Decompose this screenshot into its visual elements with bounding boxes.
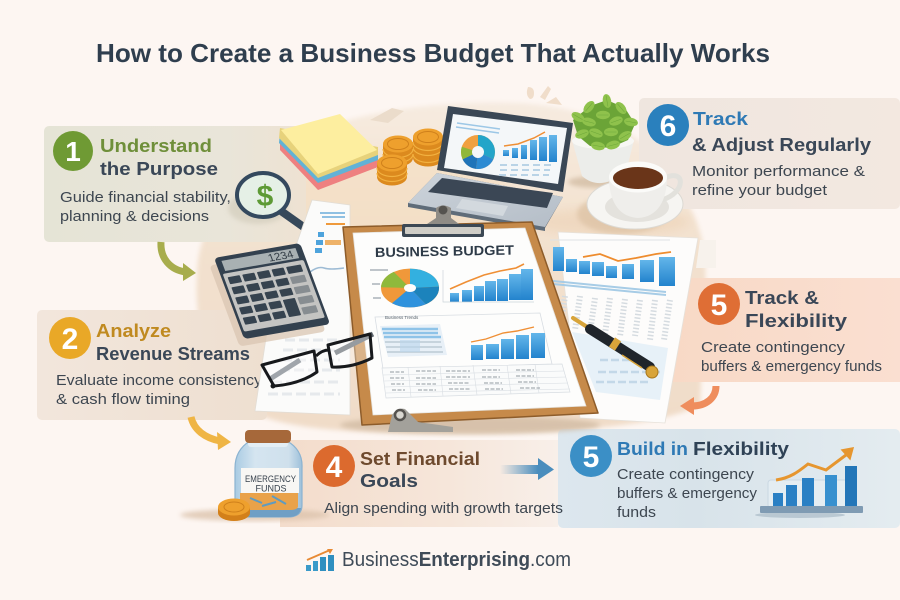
icon: eyeglasses bbox=[262, 334, 373, 388]
panel 5 orange body bbox=[701, 340, 882, 375]
icon: magnifying glass with dollar: $ bbox=[257, 180, 274, 213]
panel 4 heading bbox=[360, 449, 480, 491]
panel 5 blue body: funds bbox=[617, 505, 656, 521]
panel 5 orange heading bbox=[745, 288, 847, 331]
icon: bottom clip bbox=[388, 409, 453, 432]
panel 6 body: Monitor performance & bbox=[692, 164, 865, 180]
icon: rising bar chart bbox=[755, 448, 863, 518]
icon: emergency funds jar bbox=[180, 430, 330, 521]
panel 4: set financial goals bbox=[280, 440, 563, 527]
badge 6 bbox=[647, 104, 689, 146]
clipboard second bar chart bbox=[471, 333, 545, 360]
arrow: step 5 to panel below bbox=[680, 386, 716, 415]
clipboard data table bbox=[382, 364, 570, 398]
logo text: BusinessEnterprising.com bbox=[342, 549, 571, 571]
panel 6 background bbox=[639, 98, 900, 209]
panel 5: track and flexibility bbox=[672, 278, 900, 382]
right paper sheet bbox=[550, 232, 716, 423]
panel 6 heading: Track bbox=[693, 109, 749, 129]
clipboard paper bbox=[353, 228, 586, 415]
panel 1 body: Guide financial stability, bbox=[60, 190, 231, 206]
laptop pie chart bbox=[470, 144, 486, 160]
panel 2 heading: Analyze bbox=[96, 321, 171, 341]
clipboard pie chart bbox=[396, 278, 424, 298]
panel 4 background bbox=[280, 440, 558, 527]
panel 2 body bbox=[56, 373, 263, 408]
panel 1 background bbox=[44, 126, 306, 242]
panel 6 body: refine your budget bbox=[692, 183, 827, 199]
panel 5 blue heading bbox=[617, 439, 789, 459]
title: How to Create a Business Budget That Actually Works bbox=[96, 38, 770, 68]
panel 5 blue body: Create contingency bbox=[617, 467, 755, 483]
panel 1 heading bbox=[100, 136, 218, 179]
panel 4 heading: Goals bbox=[360, 471, 418, 491]
panel 6: track and adjust regularly bbox=[639, 98, 900, 209]
badge 1: 1 bbox=[65, 136, 81, 167]
panel 5: build in flexibility bbox=[558, 429, 900, 528]
badge 2 bbox=[49, 317, 91, 359]
panel 5 orange heading: Flexibility bbox=[745, 311, 847, 331]
foliage bbox=[570, 93, 639, 151]
icon: calculator bbox=[207, 243, 332, 347]
icon: coffee cup on saucer bbox=[577, 162, 683, 234]
icon: calculator: 1234 bbox=[266, 249, 295, 264]
jar label bbox=[241, 468, 299, 494]
panel 2 heading: Revenue Streams bbox=[96, 344, 250, 364]
badge 1 bbox=[53, 131, 93, 171]
panel 1 heading: the Purpose bbox=[100, 159, 218, 179]
panel 2 heading bbox=[96, 321, 250, 364]
panel 5 orange background bbox=[672, 278, 900, 382]
clipboard bar chart bbox=[450, 269, 533, 302]
clipboard top clip bbox=[402, 206, 484, 237]
jar label: EMERGENCY bbox=[245, 474, 297, 485]
panel 5 blue body: buffers & emergency bbox=[617, 486, 758, 502]
logo icon bbox=[306, 549, 334, 571]
badge 6: 6 bbox=[660, 110, 676, 143]
badge 5 blue bbox=[570, 435, 612, 477]
panel 5 orange body: buffers & emergency funds bbox=[701, 359, 882, 375]
panel 6 heading bbox=[692, 109, 871, 155]
left paper sheet bbox=[255, 200, 350, 415]
panel 5 blue heading: Build in bbox=[617, 439, 688, 459]
right sheet bars bbox=[553, 247, 675, 286]
clipboard title: BUSINESS BUDGET bbox=[375, 243, 515, 260]
panel 2 body: Evaluate income consistency bbox=[56, 373, 263, 389]
coin bbox=[218, 498, 250, 521]
panel 1 body bbox=[60, 190, 231, 225]
panel 2 body: & cash flow timing bbox=[56, 392, 190, 408]
icon: magnifying glass with dollar bbox=[228, 173, 305, 228]
clipboard lower section bbox=[375, 313, 552, 369]
clipboard: Business Trends bbox=[385, 315, 419, 320]
panel 1 body: planning & decisions bbox=[60, 209, 209, 225]
badge 5 blue: 5 bbox=[583, 441, 599, 474]
panel 6 heading: & Adjust Regularly bbox=[692, 135, 871, 155]
badge 5 orange bbox=[698, 283, 740, 325]
panel 2: analyze revenue streams bbox=[37, 310, 267, 420]
laptop bars bbox=[503, 135, 557, 162]
icon: fountain pen bbox=[573, 318, 658, 378]
panel 1: understand the purpose bbox=[44, 126, 306, 242]
badge 4: 4 bbox=[326, 451, 343, 484]
panel 5 orange body: Create contingency bbox=[701, 340, 846, 356]
clipboard bbox=[340, 206, 600, 434]
panel 5 blue body bbox=[617, 467, 758, 521]
badge 4 bbox=[313, 445, 355, 487]
panel 2 background bbox=[37, 310, 267, 420]
panel 4 heading: Set Financial bbox=[360, 449, 480, 469]
logo: BusinessEnterprising.com bbox=[306, 549, 571, 571]
badge 5 orange: 5 bbox=[711, 289, 727, 322]
panel 6 body bbox=[692, 164, 865, 199]
panel 1 heading: Understand bbox=[100, 136, 212, 156]
panel 5 orange heading: Track & bbox=[745, 288, 819, 308]
panel 4 body: Align spending with growth targets bbox=[324, 501, 563, 517]
badge 2: 2 bbox=[62, 323, 78, 356]
icon: coin stacks bbox=[377, 128, 443, 186]
arrow: step 2 to step 4 bbox=[191, 417, 231, 450]
icon: laptop bbox=[408, 106, 573, 231]
jar label: FUNDS bbox=[256, 484, 286, 494]
panel 5 blue background bbox=[558, 429, 900, 528]
desk surface bbox=[197, 86, 706, 434]
icon: potted plant bbox=[568, 93, 639, 188]
panel 5 blue heading: Flexibility bbox=[693, 439, 789, 459]
icon: sticky notes bbox=[279, 114, 378, 190]
arrow: step 1 to step 2 bbox=[161, 242, 196, 281]
arrow: step 4 to step 5 bbox=[500, 458, 554, 480]
